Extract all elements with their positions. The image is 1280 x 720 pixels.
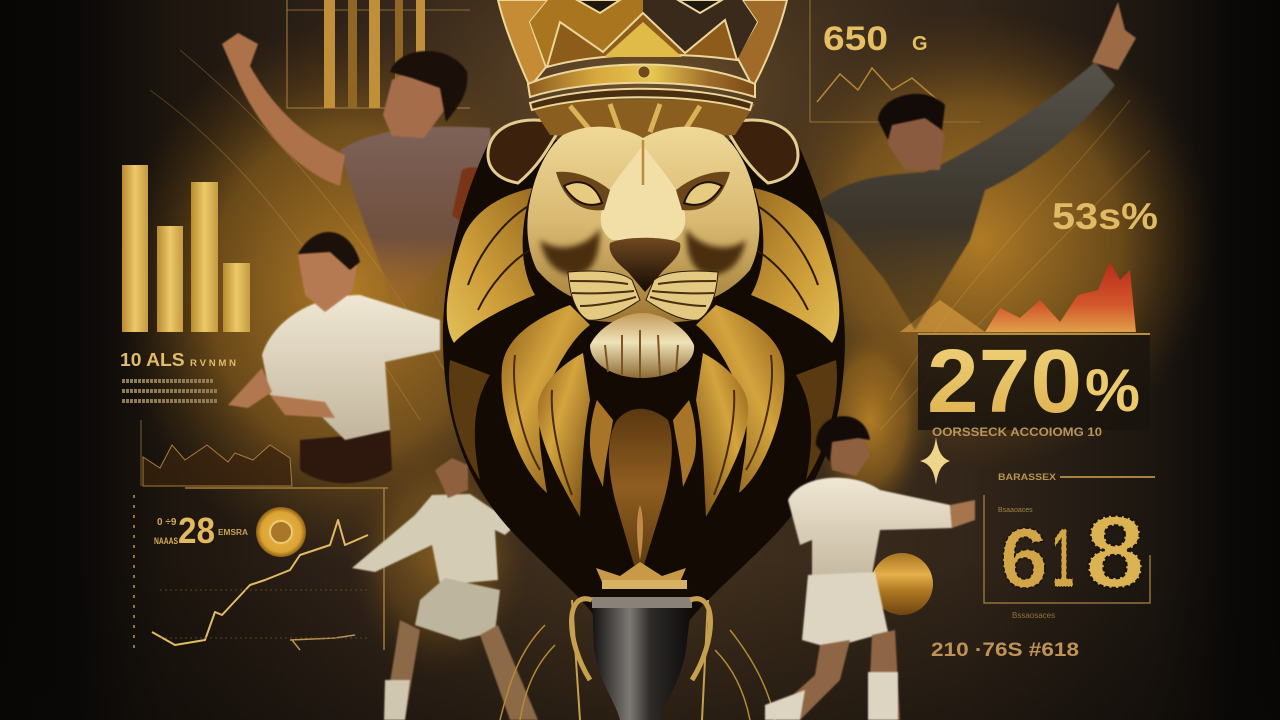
gold ball xyxy=(871,553,933,615)
top right stat: G xyxy=(912,33,928,55)
icon: sparkle xyxy=(920,437,950,485)
left lower panel with line chart: EMSRA xyxy=(218,528,248,537)
top right stat: 650 xyxy=(823,20,888,58)
line chart xyxy=(152,520,370,650)
left stat label xyxy=(120,350,236,401)
cheek shadows xyxy=(540,228,746,275)
left mane half xyxy=(447,188,613,517)
player: left middle xyxy=(228,232,440,483)
mini area chart xyxy=(817,68,940,102)
highlight panel 270%: % xyxy=(1085,357,1140,424)
player: top right xyxy=(815,2,1136,330)
top right stat xyxy=(810,0,980,122)
right lower panel xyxy=(984,472,1155,620)
bottom right caption: 210 ·76S #618 xyxy=(931,640,1079,661)
right lower panel: 8 xyxy=(1085,495,1145,609)
eyes and brows xyxy=(556,172,610,210)
right mane half xyxy=(673,188,839,517)
right stat 53%: 53s% xyxy=(1052,196,1158,237)
player: bottom right xyxy=(765,416,975,720)
nose bridge xyxy=(601,145,685,240)
right lower panel: Bsaaoaces xyxy=(998,507,1033,514)
right lower panel: 1 xyxy=(1052,511,1074,605)
left bar chart xyxy=(122,165,250,332)
gold grass strands xyxy=(500,625,775,720)
chin beard xyxy=(590,313,694,378)
right lower panel: BARASSEX xyxy=(998,472,1056,482)
muzzle xyxy=(568,271,640,320)
player: bottom left xyxy=(352,458,538,720)
main lion emblem xyxy=(443,100,845,625)
left lower panel with line chart: 0 ÷9 xyxy=(157,517,177,528)
mane silhouette xyxy=(443,140,845,625)
player: top left xyxy=(222,33,491,310)
trophy xyxy=(571,562,711,720)
head top mane xyxy=(530,100,755,140)
ears xyxy=(488,120,562,183)
left lower panel with line chart: NAAAS xyxy=(154,536,178,546)
left lower panel with line chart: 28 xyxy=(178,510,215,551)
highlight panel 270%: 270 xyxy=(927,332,1082,432)
crown xyxy=(498,0,787,110)
face xyxy=(527,127,759,325)
icon: gold coin xyxy=(256,507,306,557)
right lower panel: 6 xyxy=(1000,511,1048,605)
central lock xyxy=(609,409,672,565)
highlight panel 270%: OORSSECK ACCOIOMG 10 xyxy=(932,425,1102,439)
red area chart xyxy=(900,262,1136,332)
left stat label: 10 ALS R V N M N xyxy=(120,350,236,370)
left area line chart xyxy=(141,420,292,486)
left lower panel with line chart xyxy=(134,488,388,650)
right lower panel: Bssaosaces xyxy=(1012,611,1055,620)
highlight panel 270% xyxy=(918,332,1150,439)
nose xyxy=(610,238,680,292)
top bar chart panel xyxy=(287,0,470,108)
